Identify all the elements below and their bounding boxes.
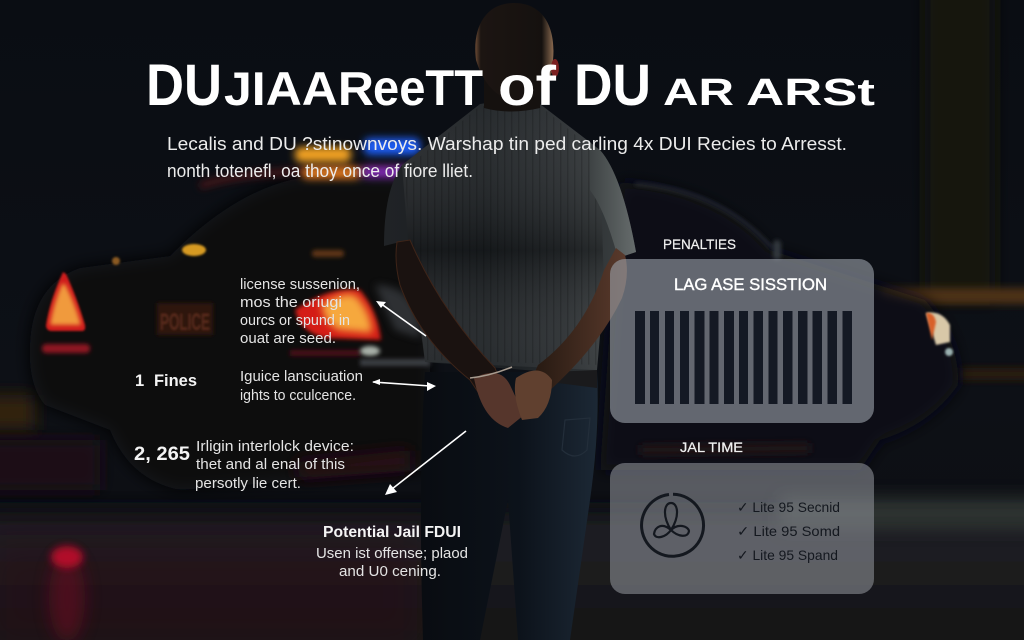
panel: jail time (610, 463, 874, 594)
car details (157, 303, 213, 335)
callout: license suspension: mos the oriugi (240, 295, 342, 311)
arrow: license to wrist (376, 301, 426, 336)
police car (blurred) (30, 138, 958, 490)
title: eeTT (373, 60, 483, 116)
callout: license suspension: ourcs or spund in (240, 313, 350, 329)
title: DU (574, 53, 651, 118)
callout: interlock device (195, 439, 354, 492)
shirt (384, 100, 636, 372)
callout: interlock device: Irligin interlolck device: (196, 439, 354, 455)
title: JIAAR (224, 62, 374, 115)
callout: interlock device: persotly lie cert. (195, 476, 301, 492)
panel: license suspension (610, 259, 874, 423)
callout: potential jail: Potential Jail FDUI (323, 524, 461, 541)
callout: fines (135, 372, 197, 390)
right arm (525, 248, 627, 395)
barcode bars (635, 311, 852, 404)
heading: jail time: JAL TIME (680, 439, 743, 455)
panel heading: LAG ASE SISSTION (674, 275, 827, 294)
head and neck (484, 70, 542, 112)
icon: ring with knot (642, 494, 704, 556)
callout: ignition (240, 369, 363, 404)
arrow: ignition to belt (372, 379, 436, 391)
callout: license suspension (240, 277, 360, 347)
belt (550, 368, 597, 388)
police car (blurred): POLICE (160, 309, 210, 336)
callout: potential jail: and U0 cening. (339, 564, 441, 580)
title: AR (663, 72, 734, 114)
intro text: nonth totenefl, oa thoy once of fiore lliet. (167, 161, 473, 181)
callout: license suspension: ouat are seed. (240, 331, 336, 347)
callout: fines: Fines (154, 372, 197, 390)
left arm (396, 240, 505, 395)
title (146, 53, 875, 118)
title: ARSt (746, 72, 875, 114)
checklist: ✓ Lite 95 Secnid (737, 499, 840, 515)
hands (474, 373, 524, 428)
callout: interlock amount: 2, 265 (134, 444, 190, 465)
callout: ignition: ights to cculcence. (240, 388, 356, 404)
checklist: ✓ Lite 95 Spand (737, 547, 838, 563)
callout: interlock device: thet and al enal of this (196, 457, 345, 473)
callout: potential jail: Usen ist offense; plaod (316, 546, 468, 562)
checklist (737, 499, 840, 563)
callout: ignition: Iguice lansciuation (240, 369, 363, 385)
right car lights (926, 312, 950, 345)
title: of (498, 54, 556, 117)
legs and jeans (421, 372, 598, 640)
person seen from behind, hands cuffed (384, 3, 636, 640)
checklist: ✓ Lite 95 Somd (737, 523, 840, 539)
title: DU (146, 53, 222, 118)
handcuff (470, 367, 512, 378)
callout: fines: 1 (135, 372, 144, 390)
light bar (295, 138, 420, 179)
arrow: to potential jail (385, 431, 466, 495)
tail lights (46, 272, 85, 331)
intro text (167, 134, 847, 181)
callout: license suspension: license sussenion, (240, 277, 360, 293)
callout: potential jail (316, 524, 468, 580)
heading: penalties: PENALTIES (663, 236, 736, 252)
intro text: Lecalis and DU ?stinownvoys. Warshap tin ped carling 4x DUI Recies to Arresst. (167, 134, 847, 154)
